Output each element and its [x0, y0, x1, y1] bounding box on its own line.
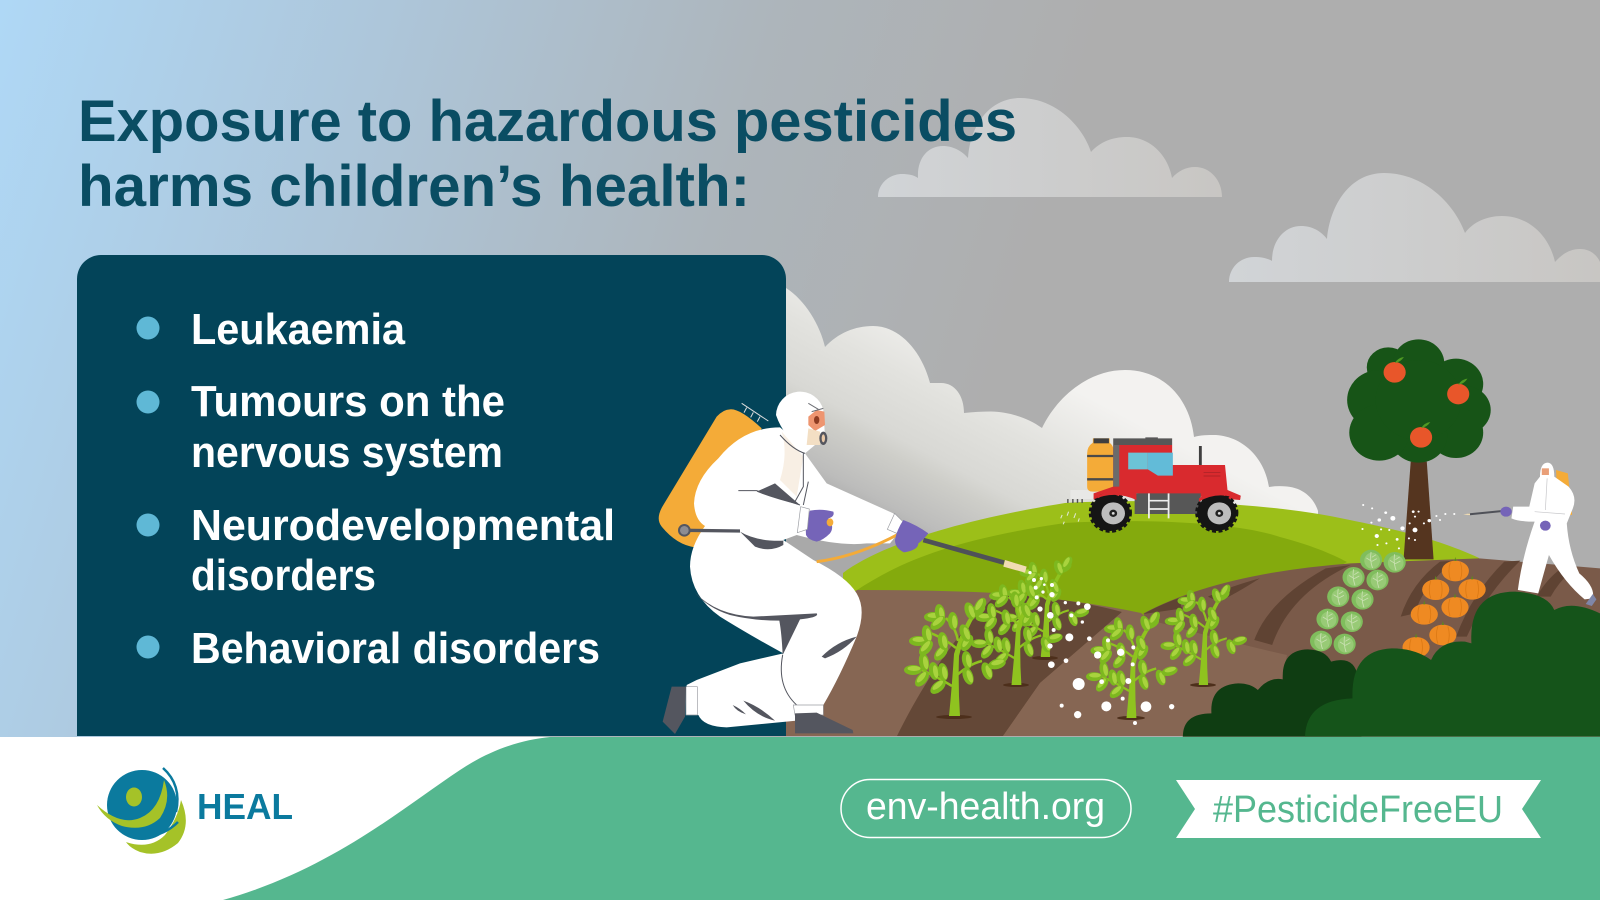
- front cuff: [793, 705, 823, 715]
- front wheel: [1197, 494, 1237, 531]
- cloud: upper middle: [878, 98, 1222, 197]
- nozzle: [1003, 560, 1027, 573]
- item: tumours: [136, 377, 505, 477]
- pumpkins: [1402, 557, 1486, 658]
- hill: light green: [843, 501, 1479, 640]
- large worker in protective suit: [659, 392, 1027, 734]
- crown: [1347, 339, 1491, 463]
- dark bush: [1183, 649, 1361, 737]
- wand: [923, 540, 1004, 563]
- website pill: env-health.org: [866, 786, 1105, 828]
- cab and hood: [1094, 445, 1241, 500]
- website pill: [841, 780, 1131, 838]
- list of harms: [136, 305, 615, 673]
- tree: [1347, 339, 1491, 559]
- hashtag ribbon: [1176, 780, 1541, 838]
- title: Exposure to hazardous pesticides: [78, 89, 1017, 154]
- logo globe: [107, 770, 177, 840]
- item: behavioral: Behavioral disorders: [191, 624, 600, 673]
- hashtag ribbon: #PesticideFreeEU: [1213, 789, 1503, 831]
- trunk: [1404, 462, 1434, 559]
- logo swoosh green: [97, 780, 167, 828]
- rear wheel: [1090, 494, 1130, 531]
- front boot: [795, 713, 853, 733]
- pesticide spray droplets on plants: [1028, 571, 1174, 725]
- item: neurodevelopmental: [136, 501, 615, 600]
- waist shadow: [740, 483, 800, 549]
- apples: [1384, 357, 1469, 448]
- logo wordmark: HEAL: [197, 786, 293, 827]
- face and goggles: [808, 410, 825, 431]
- hood: [776, 392, 825, 453]
- suit shading near neck: [780, 432, 803, 497]
- small worker spraying: [1463, 463, 1596, 606]
- cabbages: [1310, 550, 1406, 654]
- spray near tree: [1361, 504, 1455, 549]
- field: right ploughed rows: [1144, 558, 1600, 737]
- backpack: [659, 409, 762, 547]
- respirator: [819, 432, 827, 445]
- plants row: [904, 555, 1248, 720]
- footer white band: [0, 737, 1600, 900]
- near arm cuff: [797, 507, 809, 533]
- item: tumours: nervous system: [191, 428, 503, 477]
- face lower: [807, 428, 820, 445]
- back boot: [663, 687, 686, 734]
- back cuff: [686, 687, 697, 715]
- tractor: [1061, 437, 1241, 531]
- footer green wave: [223, 737, 1600, 900]
- suit crease lines: [780, 435, 808, 505]
- field: front light hill: [1003, 612, 1287, 736]
- rear implement: [1070, 490, 1094, 499]
- title: [78, 89, 1017, 219]
- fenders: [1094, 491, 1136, 500]
- suit body and legs: [687, 427, 903, 727]
- logo: HEAL: [97, 768, 293, 854]
- item: leukaemia: Leukaemia: [191, 305, 405, 354]
- logo swoosh outer: [126, 800, 186, 854]
- logo head dot: [126, 788, 142, 806]
- pack valve: [679, 525, 690, 536]
- field: left brown field: [786, 590, 1300, 736]
- item: neurodevelopmental: Neurodevelopmental: [191, 501, 615, 550]
- panel: list of health harms: [77, 255, 786, 736]
- field: dark furrow: [897, 593, 1122, 736]
- item: neurodevelopmental: disorders: [191, 551, 376, 600]
- hose: [817, 533, 900, 562]
- bushes: [1183, 592, 1600, 737]
- ladder: [1149, 493, 1169, 518]
- hill: dark green: [857, 521, 1347, 640]
- light bush: [1305, 592, 1600, 737]
- chassis: [1135, 493, 1201, 514]
- near glove: [806, 510, 834, 542]
- tank: [1087, 438, 1114, 492]
- pack strap: [684, 525, 740, 536]
- far glove: [895, 520, 928, 552]
- logo blue arcs: [145, 768, 178, 837]
- cloud: upper right: [1229, 173, 1600, 282]
- title: harms children’s health:: [78, 154, 750, 219]
- cloud: large behind hills: [786, 288, 1318, 600]
- far arm cuff: [887, 513, 904, 533]
- item: tumours: Tumours on the: [191, 377, 505, 426]
